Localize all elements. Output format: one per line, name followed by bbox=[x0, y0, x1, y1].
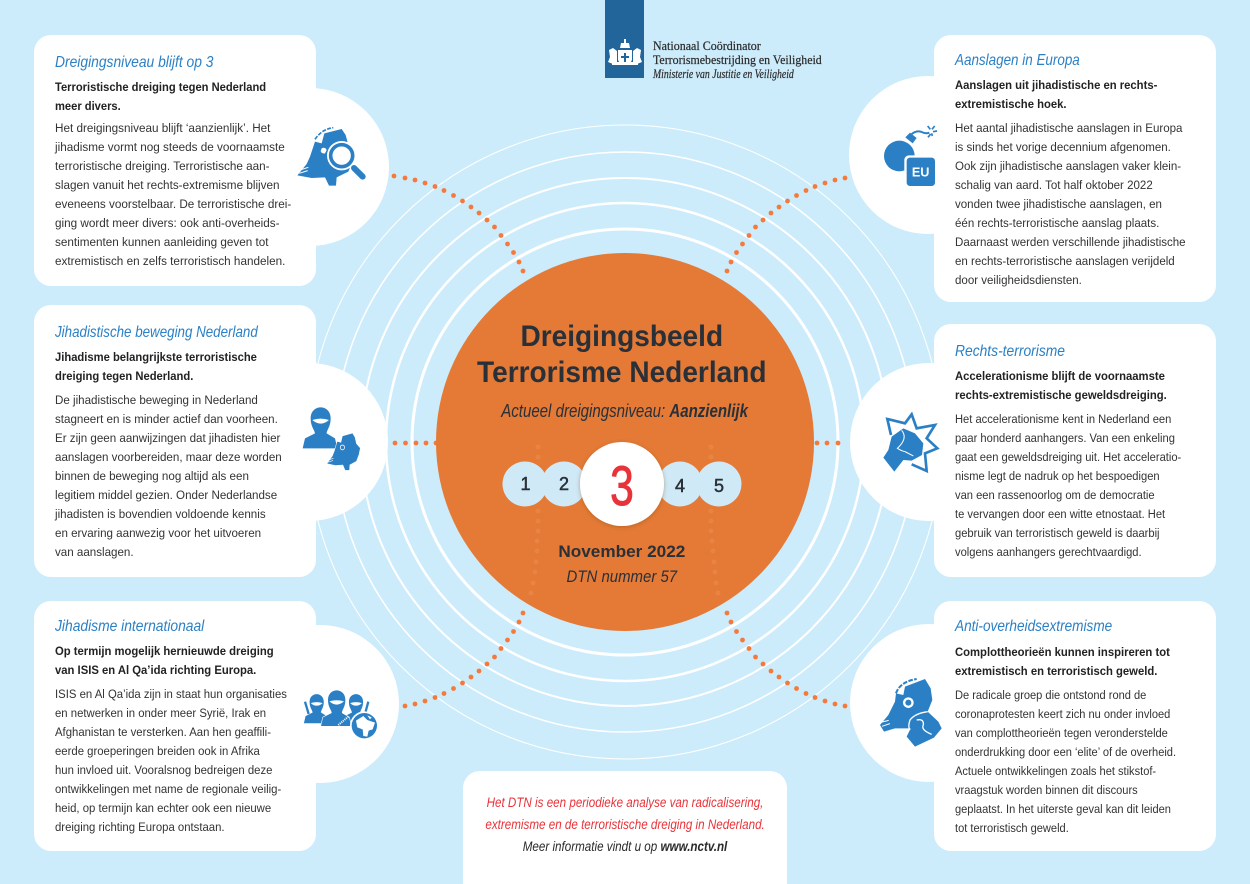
subheading: extremistische hoek. bbox=[955, 96, 1067, 110]
body text: hun invloed uit. Vooralsnog bedreigen deze bbox=[55, 762, 272, 776]
icon: three hooded fighters with globe bbox=[304, 690, 379, 740]
body text: Het dreigingsniveau blijft ‘aanzienlijk’. Het bbox=[55, 120, 270, 134]
info text bbox=[485, 795, 765, 854]
body text: gebruik van terroristisch geweld is daarbij bbox=[955, 526, 1160, 540]
panel: Aanslagen in Europa bbox=[934, 35, 1216, 302]
body text: slagen vanuit het rechts-extremisme blijven bbox=[55, 178, 280, 192]
subheading: Complottheorieën kunnen inspireren tot bbox=[955, 644, 1170, 658]
ministry name: Ministerie van Justitie en Veiligheid bbox=[653, 67, 794, 81]
date: November 2022 bbox=[558, 542, 685, 561]
body text: jihadisten is bovendien voldoende kennis bbox=[55, 506, 266, 520]
body text: Ook zijn jihadistische aanslagen vaker klein- bbox=[955, 158, 1181, 172]
info text: extremisme en de terroristische dreiging in Nederland. bbox=[485, 817, 765, 832]
subheading: extremistisch en terroristisch geweld. bbox=[955, 664, 1157, 678]
title: Terrorisme Nederland bbox=[477, 356, 767, 389]
body text: terroristische dreiging. Terroristische aan- bbox=[55, 158, 270, 172]
heading: Anti-overheidsextremisme bbox=[955, 618, 1112, 635]
body text bbox=[55, 686, 287, 834]
body text: één rechts-terroristische aanslag plaats. bbox=[955, 216, 1159, 230]
body text: vraagstuk worden binnen dit discours bbox=[955, 782, 1138, 796]
heading: Jihadistische beweging Nederland bbox=[55, 324, 258, 340]
issue number: DTN nummer 57 bbox=[566, 567, 677, 586]
body text: coronaprotesten keert zich nu onder invloed bbox=[955, 706, 1170, 720]
body text: paar honderd aanhangers. Van een enkeling bbox=[955, 430, 1175, 444]
panel: Rechts-terrorisme bbox=[934, 324, 1216, 577]
body text: nisme legt de nadruk op het bespoedigen bbox=[955, 468, 1160, 482]
body text: van complottheorieën tegen veronderstelde bbox=[955, 726, 1168, 740]
ministry name: Terrorismebestrijding en Veiligheid bbox=[653, 53, 822, 67]
body text: legitiem middel gezien. Onder Nederlandse bbox=[55, 488, 277, 502]
threat level label: Actueel dreigingsniveau: Aanzienlijk bbox=[502, 401, 748, 421]
body text: tot terroristisch geweld. bbox=[955, 820, 1069, 834]
subheading: Op termijn mogelijk hernieuwde dreiging bbox=[55, 644, 274, 658]
threat level scale bbox=[502, 442, 742, 528]
body text: geplaatst. In het uiterste geval kan dit leiden bbox=[955, 802, 1171, 816]
ministry name: Nationaal Coördinator bbox=[653, 39, 761, 53]
icon: bomb with EU badge bbox=[884, 126, 937, 188]
panel: Jihadisme internationaal bbox=[34, 601, 316, 851]
body text: eerde groeperingen breiden ook in Afrika bbox=[55, 744, 260, 758]
body text: ISIS en Al Qa’ida zijn in staat hun organisaties bbox=[55, 686, 287, 700]
icon: Netherlands with fist bbox=[880, 679, 942, 747]
ministry name bbox=[652, 39, 822, 81]
threat level scale: 2 bbox=[559, 474, 569, 494]
subheading: Accelerationisme blijft de voornaamste bbox=[955, 368, 1165, 382]
body text: schalig van aard. Tot half oktober 2022 bbox=[955, 178, 1153, 192]
central orange circle bbox=[436, 253, 814, 631]
body text: sentimenten kunnen aanleiding geven tot bbox=[55, 234, 269, 248]
body text bbox=[955, 688, 1176, 834]
body text: Actuele ontwikkelingen zoals het stikstof- bbox=[955, 764, 1156, 778]
heading: Jihadisme internationaal bbox=[55, 618, 204, 634]
body text: Het accelerationisme kent in Nederland een bbox=[955, 412, 1171, 426]
subheading: meer divers. bbox=[55, 98, 121, 112]
body text: eveneens voorstelbaar. De terroristische drei- bbox=[55, 196, 291, 210]
body text: stagneert en is minder actief dan voorheen. bbox=[55, 412, 278, 426]
body text: onderdrukking door een ‘elite’ of de overheid. bbox=[955, 744, 1176, 758]
body text: van aanslagen. bbox=[55, 544, 134, 558]
body text bbox=[54, 392, 282, 558]
body text: dreiging richting Europa ontstaan. bbox=[55, 820, 225, 834]
title: Dreigingsbeeld bbox=[521, 320, 723, 353]
subheading: dreiging tegen Nederland. bbox=[55, 368, 193, 382]
panel: Dreigingsniveau blijft op 3 bbox=[34, 35, 316, 286]
title bbox=[477, 320, 767, 389]
heading: Aanslagen in Europa bbox=[955, 52, 1080, 68]
body text: De radicale groep die ontstond rond de bbox=[955, 688, 1146, 702]
body text bbox=[955, 120, 1186, 286]
subheading bbox=[955, 368, 1167, 402]
subheading bbox=[55, 80, 266, 112]
threat level scale: 3 bbox=[610, 454, 634, 517]
body text: ontwikkelingen met name de regionale veilig- bbox=[55, 782, 281, 796]
body text: door veiligheidsdiensten. bbox=[955, 272, 1082, 286]
body text: binnen de beweging nog altijd als een bbox=[55, 468, 249, 482]
body text: en rechts-terroristische aanslagen verijdeld bbox=[955, 254, 1175, 268]
subheading bbox=[55, 644, 274, 676]
body text: extremistisch en zelfs terroristisch handelen. bbox=[55, 254, 285, 268]
info box bbox=[463, 771, 787, 884]
panel: Jihadistische beweging Nederland bbox=[34, 305, 316, 577]
body text: en ervaring aanwezig voor het uitvoeren bbox=[55, 526, 261, 540]
subheading: van ISIS en Al Qa’ida richting Europa. bbox=[55, 662, 256, 676]
icon: hooded person and Netherlands bbox=[303, 407, 360, 470]
body text: volgens aanhangers gerechtvaardigd. bbox=[955, 544, 1142, 558]
body text: gaat een geweldsdreiging uit. Het acceleratio- bbox=[955, 450, 1181, 464]
icon: fist with burst bbox=[883, 414, 937, 472]
body text: Afghanistan te versterken. Aan hen geaffili- bbox=[55, 724, 271, 738]
threat level scale: 5 bbox=[714, 476, 724, 496]
subheading: Aanslagen uit jihadistische en rechts- bbox=[955, 78, 1157, 92]
body text: De jihadistische beweging in Nederland bbox=[55, 392, 258, 406]
body text bbox=[955, 412, 1181, 558]
logo bar with crest bbox=[605, 0, 644, 78]
body text: jihadisme vormt nog steeds de voornaamste bbox=[55, 140, 285, 154]
subheading bbox=[955, 78, 1157, 110]
body text: te vervangen door een witte etnostaat. Het bbox=[955, 506, 1165, 520]
subheading bbox=[955, 644, 1170, 678]
body text: Daarnaast werden verschillende jihadistische bbox=[955, 234, 1186, 248]
info text: Meer informatie vindt u op www.nctv.nl bbox=[523, 839, 727, 854]
body text: van een rassenoorlog om de democratie bbox=[955, 488, 1155, 502]
heading: Rechts-terrorisme bbox=[955, 342, 1065, 360]
icon: bomb with EU badge: EU bbox=[912, 165, 929, 179]
subheading: rechts-extremistische geweldsdreiging. bbox=[955, 388, 1167, 402]
body text: ging wordt meer divers: ook anti-overheids- bbox=[55, 216, 280, 230]
body text bbox=[54, 120, 291, 268]
panel: Anti-overheidsextremisme bbox=[934, 601, 1216, 851]
threat level scale: 4 bbox=[675, 476, 685, 496]
info text: Het DTN is een periodieke analyse van radicalisering, bbox=[487, 795, 763, 810]
body text: aanslagen voorbereiden, maar deze worden bbox=[55, 450, 282, 464]
body text: en netwerken in onder meer Syrië, Irak en bbox=[55, 706, 266, 720]
subheading bbox=[55, 350, 257, 382]
heading: Dreigingsniveau blijft op 3 bbox=[55, 54, 213, 70]
body text: vonden twee jihadistische aanslagen, en bbox=[955, 196, 1162, 210]
threat level scale: 1 bbox=[520, 474, 531, 494]
subheading: Jihadisme belangrijkste terroristische bbox=[55, 350, 257, 364]
body text: heid, op termijn kan echter ook een nieuwe bbox=[55, 800, 271, 814]
icon: Netherlands with magnifying glass bbox=[297, 128, 363, 186]
body text: Het aantal jihadistische aanslagen in Europa bbox=[955, 120, 1182, 134]
body text: is sinds het vorige decennium afgenomen. bbox=[955, 140, 1171, 154]
subheading: Terroristische dreiging tegen Nederland bbox=[55, 80, 266, 94]
body text: Er zijn geen aanwijzingen dat jihadisten hier bbox=[55, 430, 280, 444]
